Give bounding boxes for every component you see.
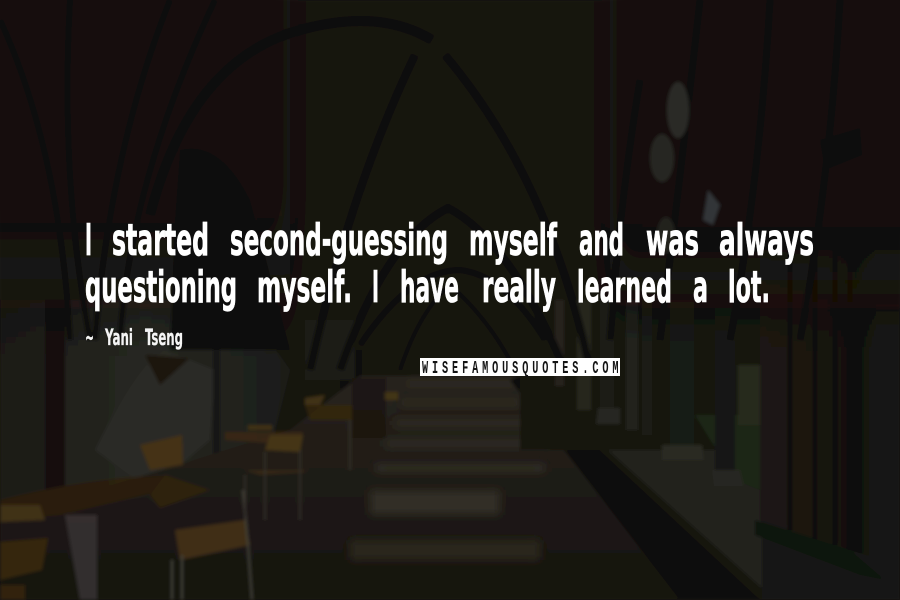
dark kerb and raised walkway [510,376,900,600]
attribution: ~ [85,326,94,351]
floor [0,376,720,600]
quote line 2: myself. [257,262,352,313]
quote line 2: questioning [85,262,237,313]
quote line 1 [85,215,814,266]
quote line 1: was [646,215,699,266]
quote line 2: have [400,262,459,313]
quote text [85,215,814,313]
foreground clustered pillar [755,250,900,600]
quote line 2: learned [577,262,672,313]
quote line 2: lot. [728,262,770,313]
attribution: Yani [104,326,133,351]
upper shadow fades [0,0,900,350]
left wall [0,300,362,520]
quote line 2: really [482,262,556,313]
quote line 2: I [372,262,379,313]
quote line 1: started [112,215,209,266]
quote line 1: always [719,215,814,266]
quote line 1: second-guessing [230,215,448,266]
ceiling vault ribs [0,0,840,370]
garden colonnade [520,300,760,490]
carved roundel [650,82,862,253]
cafe tables and chairs [0,378,398,600]
quote line 2 [85,262,770,313]
watermark badge: WISEFAMOUSQUOTES.COM [422,357,618,379]
quote line 1: I [85,215,92,266]
floor sunlight bands [350,382,550,560]
attribution: Tseng [145,326,183,351]
quote line 1: and [579,215,624,266]
quote line 2: a [693,262,708,313]
quote line 1: myself [469,215,557,266]
attribution [85,326,183,351]
